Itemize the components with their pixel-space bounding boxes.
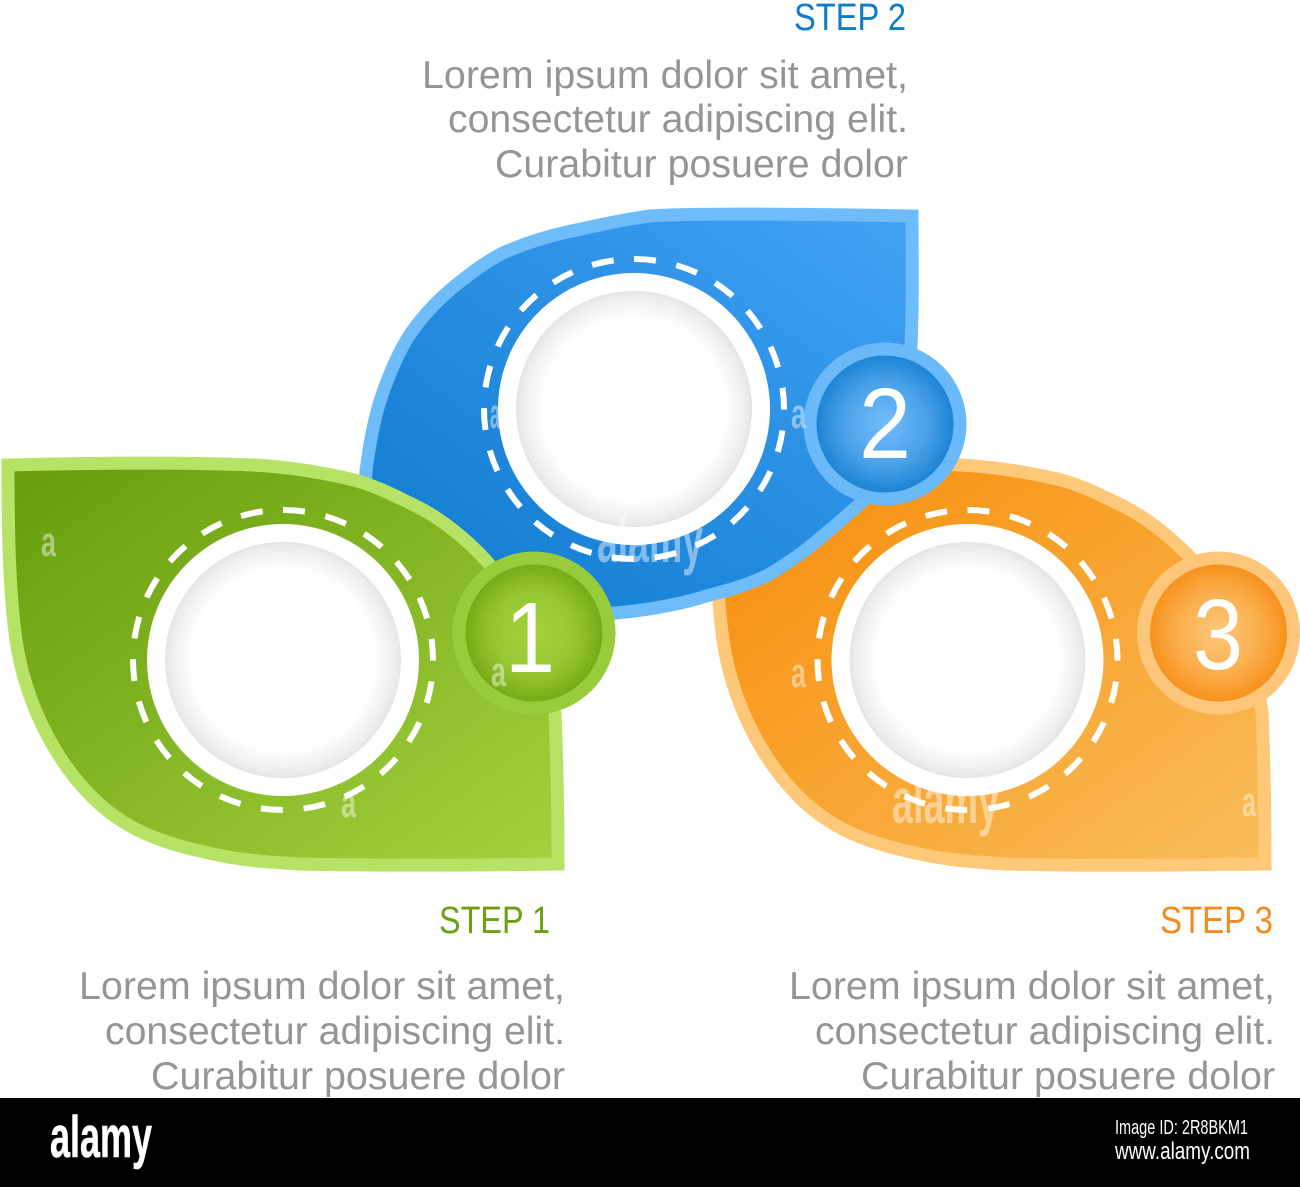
watermark marks: alamy [892,765,999,837]
watermark marks: a [341,779,356,826]
step 1 description [79,965,565,1098]
step 3 description: Lorem ipsum dolor sit amet, [789,965,1275,1008]
image id: Image ID: 2R8BKM1 [1115,1117,1248,1139]
watermark marks: a [791,390,806,437]
step 1 description: Curabitur posuere dolor [151,1055,565,1098]
badge 2: 2 [859,368,911,480]
website: www.alamy.com [1114,1138,1250,1165]
green white ring [147,524,419,796]
panel: step 3 orange leaf [715,463,1294,865]
badge 1: 1 [505,582,555,694]
step 1 description: Lorem ipsum dolor sit amet, [79,965,565,1008]
text block: step 2 [422,0,908,186]
watermark marks: a [490,390,500,437]
watermark marks: a [791,649,806,696]
orange white ring [832,524,1104,796]
green dashed ring [133,510,433,810]
badge 3 [1144,558,1294,708]
step 2 description: consectetur adipiscing elit. [448,98,908,141]
watermark marks: alamy [597,504,703,576]
footer bar [0,1098,1300,1187]
watermark marks: a [1242,778,1256,825]
badge 1 [459,558,609,708]
step 2 description: Curabitur posuere dolor [495,143,908,186]
alamy logo: alamy [50,1105,152,1170]
step 1 description: consectetur adipiscing elit. [105,1010,565,1053]
orange leaf shape [715,463,1265,865]
badge 2 [810,349,960,499]
badge 3: 3 [1193,579,1243,691]
text block: step 3 [789,900,1275,1098]
blue inner circle [516,291,752,527]
step 2 description: Lorem ipsum dolor sit amet, [422,54,908,97]
panel: step 2 blue leaf [361,214,960,615]
blue white ring [498,273,770,545]
watermark marks: a [41,518,56,565]
step 3 description: consectetur adipiscing elit. [815,1010,1275,1053]
blue leaf shape [361,214,912,615]
blue dashed ring [484,259,784,559]
step 3 heading: STEP 3 [1160,900,1273,942]
orange inner circle [850,542,1086,778]
panel: step 1 green leaf [8,463,609,865]
orange dashed ring [818,510,1118,810]
step 3 description: Curabitur posuere dolor [861,1055,1275,1098]
step 2 description [422,54,908,186]
watermark marks: a [491,648,506,695]
watermark marks [41,390,1256,837]
green leaf shape [8,463,558,865]
step 3 description [789,965,1275,1098]
text block: step 1 [79,900,565,1098]
green inner circle [165,542,401,778]
step 1 heading: STEP 1 [439,900,550,942]
